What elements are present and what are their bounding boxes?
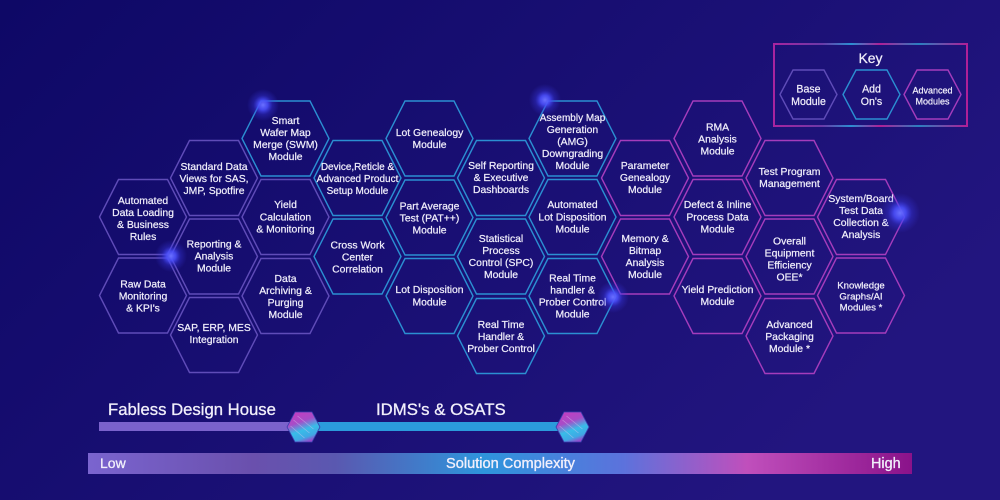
hex: Raw Data Monitoring: & KPI's [126,304,160,314]
hex: Standard Data Views: JMP, Spotfire [183,186,245,197]
key: advanced modules: Advanced [912,86,953,96]
hex: Smart Wafer Map: Smart [272,116,299,127]
hex: Real Time Handler [458,298,544,374]
hex: Cross Work Center: Correlation [332,264,383,276]
hex: Memory & Bitmap: Memory & [621,234,669,245]
hex: Lot Disposition: Lot Disposition [395,285,464,296]
hex: Overall Equipment Efficiency: Overall [773,236,806,248]
hex: Smart Wafer Map [242,101,329,176]
label: Fabless Design House: Fabless Design House [108,400,276,419]
hex: System/Board Test: Analysis [842,230,880,241]
hex: Automated Lot Disposition [529,180,616,254]
key: add on's [843,70,900,119]
hex: Assembly Map Generation: Module [555,161,590,172]
hex: Standard Data Views: Standard Data [180,162,248,173]
hex: Overall Equipment Efficiency: OEE* [776,272,802,284]
glow: Reporting hexagon vertex [155,240,187,272]
hex: Real Time handler Prober Module [529,258,616,334]
hex: Parameter Genealogy: Parameter [621,161,670,172]
hex: System/Board Test: System/Board [828,194,894,205]
hex: Yield Prediction: Module [700,297,735,308]
hex: Reporting & Analysis [170,219,258,294]
hex: SAP ERP MES [170,298,258,372]
hex: Memory & Bitmap [602,219,688,294]
hex: Test Program Management: Management [759,179,820,190]
hex: Knowledge Graphs [818,258,904,333]
hex: Knowledge Graphs: Graphs/AI [839,292,883,302]
hex: Device Reticle: Advanced Product [317,174,399,185]
hex: Lot Genealogy [386,101,473,176]
hex: Knowledge Graphs: Knowledge [837,280,885,292]
hex: Advanced Packaging [746,298,833,374]
hex: Advanced Packaging: Advanced [766,320,813,331]
label: IDMS's & OSATS: IDMS's & OSATS [376,400,506,419]
key: advanced modules [904,70,961,119]
hex: Assembly Map Generation: Generation [547,125,598,136]
hex: Overall Equipment Efficiency: Efficiency [767,260,812,272]
hex: Automated Data Loading: & Business [117,220,169,231]
glow: top of Assembly Map hexagon [529,84,561,116]
hex: Self Reporting: Dashboards [473,185,529,196]
panel: key [774,44,967,126]
hex: SAP ERP MES: SAP, ERP, MES [177,323,251,334]
hex: Yield Calculation [242,180,329,254]
hex: Defect & Inline: Module [700,224,735,236]
hex: RMA Analysis: Analysis [698,134,737,146]
hex: Device Reticle: Setup Module [327,186,389,197]
bar: Fabless [99,422,294,431]
hex: Defect & Inline: Defect & Inline [684,200,752,211]
hex: Automated Data Loading: Rules [130,232,156,243]
label: High: High [871,456,901,472]
hex: Overall Equipment Efficiency: Equipment [765,248,814,260]
hex: Assembly Map Generation [529,101,616,176]
hex: Self Reporting: & Executive [474,173,529,184]
hex: System/Board Test: Test Data [839,206,883,217]
hex: Real Time Handler: Real Time [478,320,525,331]
hex: Statistical Process Control: Control (SPC) [469,258,533,269]
hex: Part Average Test: Test (PAT++) [400,214,459,224]
hex: Cross Work Center: Center [342,252,374,264]
hex: Part Average Test: Module [412,226,447,236]
hex: Lot Disposition [386,258,473,334]
hex: Real Time handler Prober Module: Prober Control [539,298,606,308]
hex: Memory & Bitmap: Analysis [626,258,664,269]
hex: Statistical Process Control: Statistical [479,234,523,245]
hex: Part Average Test [386,180,473,255]
key border [774,44,967,126]
hex: Standard Data Views: Views for SAS, [179,174,249,185]
hex: Automated Lot Disposition: Module [555,224,590,236]
hex: Real Time Handler: Prober Control [467,344,535,355]
hex: Automated Lot Disposition: Automated [547,200,598,211]
hex: RMA Analysis: RMA [706,122,729,134]
solution complexity bar [88,453,912,474]
hex: Assembly Map Generation: Assembly Map [540,113,606,124]
hex: Data Archiving: Module [268,310,303,321]
icon: hexagon marker 1 [287,412,320,442]
hex: Statistical Process Control: Module [484,270,518,281]
hex: SAP ERP MES: Integration [189,335,239,346]
hex: Reporting & Analysis: Analysis [195,252,233,262]
hex: Lot Genealogy: Lot Genealogy [396,128,464,139]
hex: Yield Prediction: Yield Prediction [682,285,754,296]
hex: Raw Data Monitoring: Raw Data [120,280,166,290]
hex: Yield Prediction [674,258,761,334]
bar: IDMS [312,422,562,431]
hex: Advanced Packaging: Module * [769,344,810,355]
hex: Smart Wafer Map: Merge (SWM) [253,140,318,151]
hex: Device Reticle: Device,Reticle & [321,162,395,173]
icon: hexagon marker 2 [556,412,589,442]
hex: Automated Data Loading: Automated [118,196,168,207]
hex: Cross Work Center [314,219,401,294]
hex: Part Average Test: Part Average [400,202,460,212]
hex: Automated Data Loading: Data Loading [112,208,174,219]
hex: Defect & Inline [674,180,761,254]
hex: System/Board Test [818,180,904,254]
hex: Device Reticle [314,140,401,216]
key title: Key [858,50,883,66]
hex: Reporting & Analysis: Reporting & [187,240,242,250]
hex: Advanced Packaging: Packaging [765,332,814,343]
hex: Parameter Genealogy: Genealogy [620,173,671,184]
hex: Real Time handler Prober Module: Module [555,310,590,320]
hex: Assembly Map Generation: (AMG) [557,137,588,148]
hex: Yield Calculation: Yield [274,200,297,211]
hex: Overall Equipment Efficiency [746,219,833,294]
hex: Test Program Management [746,140,833,216]
hex: Automated Lot Disposition: Lot Disposition [538,212,607,224]
hex: Assembly Map Generation: Downgrading [542,149,603,160]
hex: Memory & Bitmap: Module [628,270,662,281]
key: advanced modules: Modules [915,96,950,106]
hex: Standard Data Views [170,140,258,216]
hex: Raw Data Monitoring: Monitoring [119,292,167,302]
hex: Statistical Process Control: Process [482,246,520,257]
hex: RMA Analysis: Module [700,146,735,158]
hex: Smart Wafer Map: Module [268,152,303,163]
key: base module: Base [796,84,821,96]
hex: Memory & Bitmap: Bitmap [629,246,661,257]
hex: Statistical Process Control [458,219,544,294]
hex: RMA Analysis [674,101,761,176]
hex: Parameter Genealogy: Module [628,185,662,196]
key: base module [780,70,837,119]
hex: Defect & Inline: Process Data [686,212,749,224]
hex: Self Reporting: Self Reporting [468,161,534,172]
key: add on's: On's [861,96,882,108]
hex: Real Time handler Prober Module: Real Time [549,274,596,284]
hex: Smart Wafer Map: Wafer Map [260,128,311,139]
glow: top of Smart Wafer hexagon [247,89,279,121]
label: Solution Complexity: Solution Complexity [446,456,576,472]
hex: Yield Calculation: Calculation [260,212,311,224]
key: base module: Module [791,96,826,108]
hex: Raw Data Monitoring [100,258,186,333]
hex: Automated Data Loading [100,180,186,254]
hex: Knowledge Graphs: Modules * [840,302,883,314]
hex: Real Time handler Prober Module: handler & [550,286,595,296]
hex: Self Reporting [458,140,544,216]
hex: Parameter Genealogy [602,140,688,216]
hex: Test Program Management: Test Program [759,167,820,178]
hex: Real Time Handler: Handler & [478,332,524,343]
key: add on's: Add [862,84,881,96]
hex: Lot Genealogy: Module [412,140,447,151]
hex: Yield Calculation: & Monitoring [256,224,315,236]
hex: Data Archiving [242,258,329,334]
glow: System/Board vertex [880,193,920,233]
glow: Real Time handler vertex [597,281,629,313]
hex: Lot Disposition: Module [412,298,447,308]
hex: System/Board Test: Collection & [833,218,889,229]
hex: Data Archiving: Archiving & [259,286,312,297]
hex: Cross Work Center: Cross Work [330,240,385,252]
hex: Data Archiving: Purging [268,298,304,309]
label: Low: Low [100,455,127,471]
hex: Reporting & Analysis: Module [197,264,231,274]
hex: Data Archiving: Data [275,274,297,285]
